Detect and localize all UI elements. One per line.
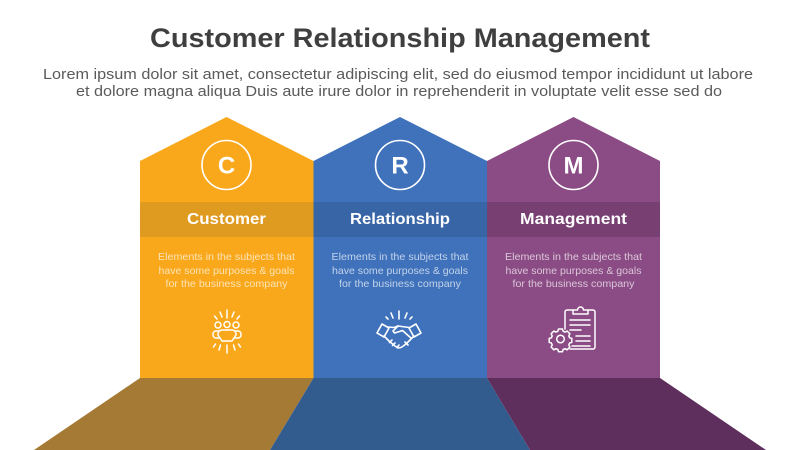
heading: customer: Customer bbox=[187, 211, 266, 228]
description: management: for the business company bbox=[512, 278, 635, 290]
arrow house: customer bbox=[140, 117, 314, 378]
arrow house: management bbox=[487, 117, 660, 378]
letter badge: R bbox=[376, 140, 424, 190]
band: customer bbox=[140, 202, 314, 237]
description: customer: for the business company bbox=[166, 278, 288, 290]
description: relationship: for the business company bbox=[339, 278, 462, 290]
floor: management bbox=[487, 378, 766, 450]
letter badge: M bbox=[549, 140, 598, 190]
panel: management bbox=[487, 117, 766, 450]
icon: clipboard and gear bbox=[549, 307, 595, 352]
description: relationship bbox=[332, 251, 469, 290]
floor: customer bbox=[34, 378, 314, 450]
description: management bbox=[505, 251, 642, 290]
subtitle text block: Lorem ipsum dolor sit amet, consectetur adipiscing elit, sed do eiusmod tempor incididunt ut labore bbox=[43, 66, 753, 83]
icon: customer group bbox=[213, 310, 241, 353]
description: management: have some purposes & goals bbox=[506, 265, 642, 277]
description: management: Elements in the subjects that bbox=[505, 251, 642, 263]
description: customer: Elements in the subjects that bbox=[158, 251, 295, 263]
letter badge: M: M bbox=[564, 152, 584, 180]
heading: relationship: Relationship bbox=[350, 211, 450, 228]
letter badge: R: R bbox=[391, 152, 409, 180]
panel: relationship bbox=[270, 117, 530, 450]
panel: customer bbox=[34, 117, 314, 450]
title: Customer Relationship Management bbox=[150, 23, 650, 53]
description: customer: have some purposes & goals bbox=[158, 265, 294, 277]
description: relationship: have some purposes & goals bbox=[332, 265, 468, 277]
band: relationship bbox=[314, 202, 487, 237]
floor: relationship bbox=[270, 378, 530, 450]
description: customer bbox=[158, 251, 295, 290]
letter badge: C: C bbox=[218, 152, 235, 180]
band: management bbox=[487, 202, 660, 237]
arrow house: relationship bbox=[314, 117, 487, 378]
letter badge: C bbox=[202, 140, 251, 190]
subtitle text block bbox=[43, 66, 753, 100]
icon: handshake bbox=[377, 311, 421, 348]
subtitle text block: et dolore magna aliqua Duis aute irure dolor in reprehenderit in voluptate velit esse sed do bbox=[76, 83, 722, 100]
heading: management: Management bbox=[520, 211, 627, 228]
description: relationship: Elements in the subjects that bbox=[332, 251, 469, 263]
